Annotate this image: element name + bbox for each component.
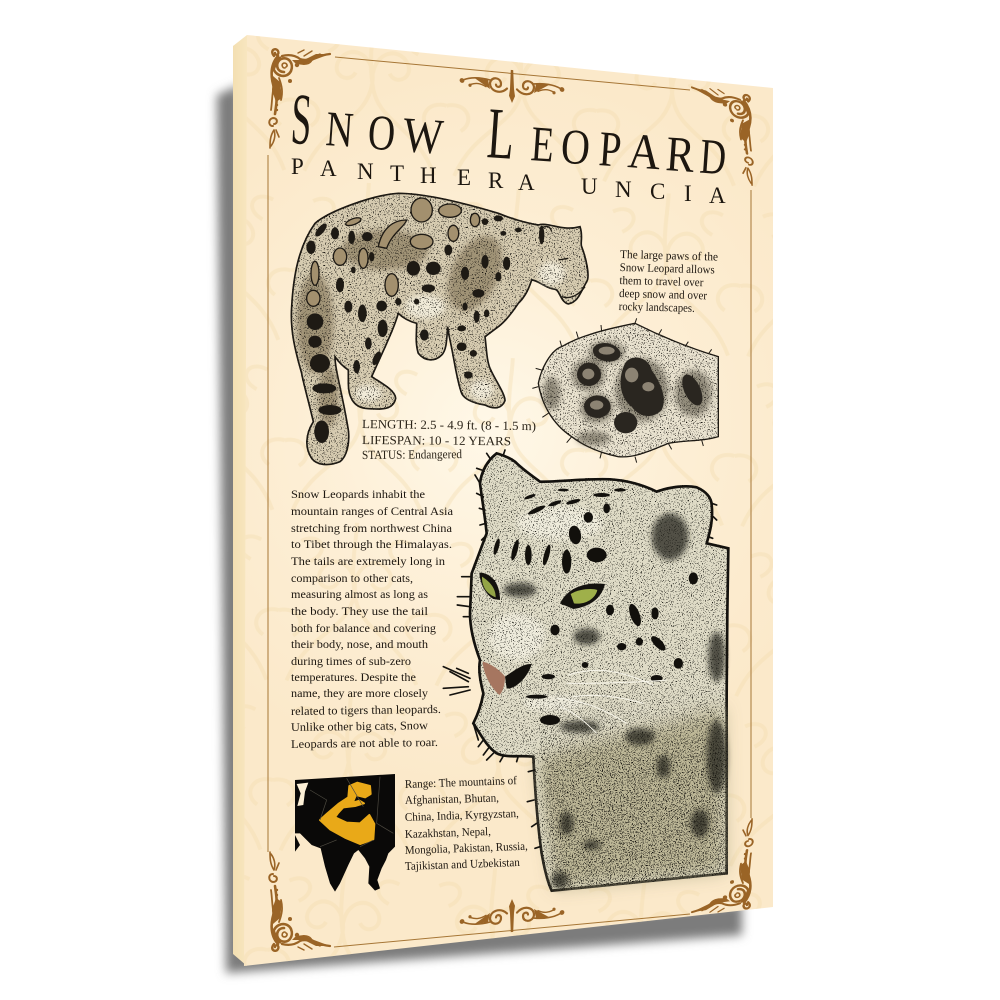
title: Snow Leopard: D bbox=[698, 129, 728, 186]
text: paw note: them to travel over bbox=[619, 273, 704, 289]
text: paw note bbox=[619, 247, 718, 316]
text: vital stats bbox=[362, 417, 536, 462]
text: range list: Mongolia, Pakistan, Russia, bbox=[405, 839, 528, 857]
map: Caspian cut-out bbox=[297, 783, 308, 806]
text: main description: stretching from northwest China bbox=[291, 521, 453, 535]
paw stipple bbox=[538, 323, 718, 457]
paw pads bbox=[577, 341, 707, 433]
text: range list: Tajikistan and Uzbekistan bbox=[405, 855, 520, 873]
ornament: top centre bbox=[460, 65, 564, 108]
title: Snow Leopard: N bbox=[324, 101, 355, 158]
paw fur shading bbox=[543, 341, 712, 446]
text: range list: Range: The mountains of bbox=[405, 773, 517, 791]
body stipple bbox=[291, 193, 588, 465]
leopard eye and mouth bbox=[542, 226, 585, 298]
range map bbox=[295, 774, 395, 892]
title: Snow Leopard: O bbox=[559, 118, 592, 176]
title: Snow Leopard: O bbox=[366, 104, 397, 162]
text: main description bbox=[291, 487, 454, 751]
title: Snow Leopard: L bbox=[485, 93, 517, 176]
text: main description: Snow Leopards inhabit the bbox=[291, 487, 425, 501]
map: black landmass bbox=[295, 774, 395, 892]
text: range list: Kazakhstan, Nepal, bbox=[405, 824, 491, 841]
decorative frame with ornaments bbox=[268, 49, 753, 951]
text: vital stats: STATUS: Endangered bbox=[362, 447, 463, 462]
head light areas bbox=[488, 507, 603, 712]
canvas shadow bbox=[217, 85, 742, 973]
title: Snow Leopard: R bbox=[664, 127, 696, 184]
title: Snow Leopard: W bbox=[401, 108, 445, 166]
map: yellow range area bbox=[320, 783, 374, 844]
ornament: bottom left corner bbox=[269, 852, 330, 951]
title: Snow Leopard: S bbox=[289, 80, 314, 160]
text: main description: name, they are more closely bbox=[291, 686, 428, 700]
head dark blots bbox=[503, 513, 727, 888]
text: main description: mountain ranges of Central Asia bbox=[291, 504, 454, 518]
whiskers bbox=[557, 670, 667, 733]
text: range list bbox=[405, 773, 528, 873]
text: paw note: deep snow and over bbox=[619, 286, 707, 302]
title: Snow Leopard: P bbox=[597, 121, 623, 178]
body hollow rosettes bbox=[307, 198, 480, 306]
right eye bbox=[560, 583, 605, 609]
title: Snow Leopard: A bbox=[626, 124, 662, 181]
ornament: top left corner bbox=[269, 49, 330, 148]
paw pad highlights bbox=[582, 347, 654, 410]
text: vital stats: LENGTH: 2.5 - 4.9 ft. (8 - 1.5 m) bbox=[362, 417, 536, 433]
text: paw note: Snow Leopard allows bbox=[620, 260, 715, 276]
neck stipple bbox=[535, 680, 727, 891]
left eye bbox=[479, 573, 500, 600]
map: country borders bbox=[310, 777, 393, 847]
illustration: snow leopard head portrait bbox=[443, 450, 728, 891]
illustration: paw bbox=[532, 318, 718, 463]
canvas side edge bbox=[233, 35, 247, 966]
text: vital stats: LIFESPAN: 10 - 12 YEARS bbox=[362, 433, 511, 448]
body shading bbox=[297, 227, 513, 427]
text: range list: Afghanistan, Bhutan, bbox=[405, 791, 499, 807]
text: main description: temperatures. Despite the bbox=[291, 670, 416, 684]
nose bbox=[483, 662, 505, 695]
text: range list: China, India, Kyrgyzstan, bbox=[405, 806, 519, 824]
text: paw note: rocky landscapes. bbox=[619, 299, 695, 315]
ornament: bottom right corner bbox=[692, 819, 753, 916]
title: Snow Leopard: E bbox=[529, 116, 556, 173]
head stipple bbox=[470, 453, 728, 891]
text: main description: Leopards are not able to roar. bbox=[291, 735, 438, 751]
text: paw note: The large paws of the bbox=[620, 247, 718, 264]
left whiskers and fur edge bbox=[443, 450, 717, 848]
text: main description: The tails are extremely long in bbox=[291, 554, 445, 568]
illustration: full-body snow leopard bbox=[291, 193, 588, 465]
text: main description: related to tigers than leopards. bbox=[291, 702, 441, 718]
title: Snow Leopard bbox=[289, 80, 728, 186]
subtitle: Panthera uncia: PANTHERA UNCIA bbox=[291, 154, 726, 208]
text: main description: measuring almost as long as bbox=[291, 587, 428, 601]
ornament: top right corner bbox=[692, 83, 753, 185]
paw fur edge bbox=[532, 318, 712, 463]
text: main description: comparison to other cats, bbox=[291, 571, 413, 585]
text: main description: during times of sub-zero bbox=[291, 654, 411, 668]
canvas front panel bbox=[244, 35, 773, 966]
head neck tone bbox=[537, 707, 725, 888]
text: main description: their body, nose, and mouth bbox=[291, 637, 428, 651]
body spots bbox=[306, 215, 544, 443]
ornament: bottom centre bbox=[460, 894, 564, 937]
text: main description: to Tibet through the Himalayas. bbox=[291, 537, 452, 551]
body light belly bbox=[355, 262, 565, 402]
map: Arabian tip bbox=[295, 835, 300, 852]
text: main description: the body. They use the tail bbox=[291, 604, 429, 618]
text: main description: both for balance and covering bbox=[291, 621, 436, 635]
text: main description: Unlike other big cats, Snow bbox=[291, 718, 429, 734]
head marks bbox=[492, 488, 698, 725]
